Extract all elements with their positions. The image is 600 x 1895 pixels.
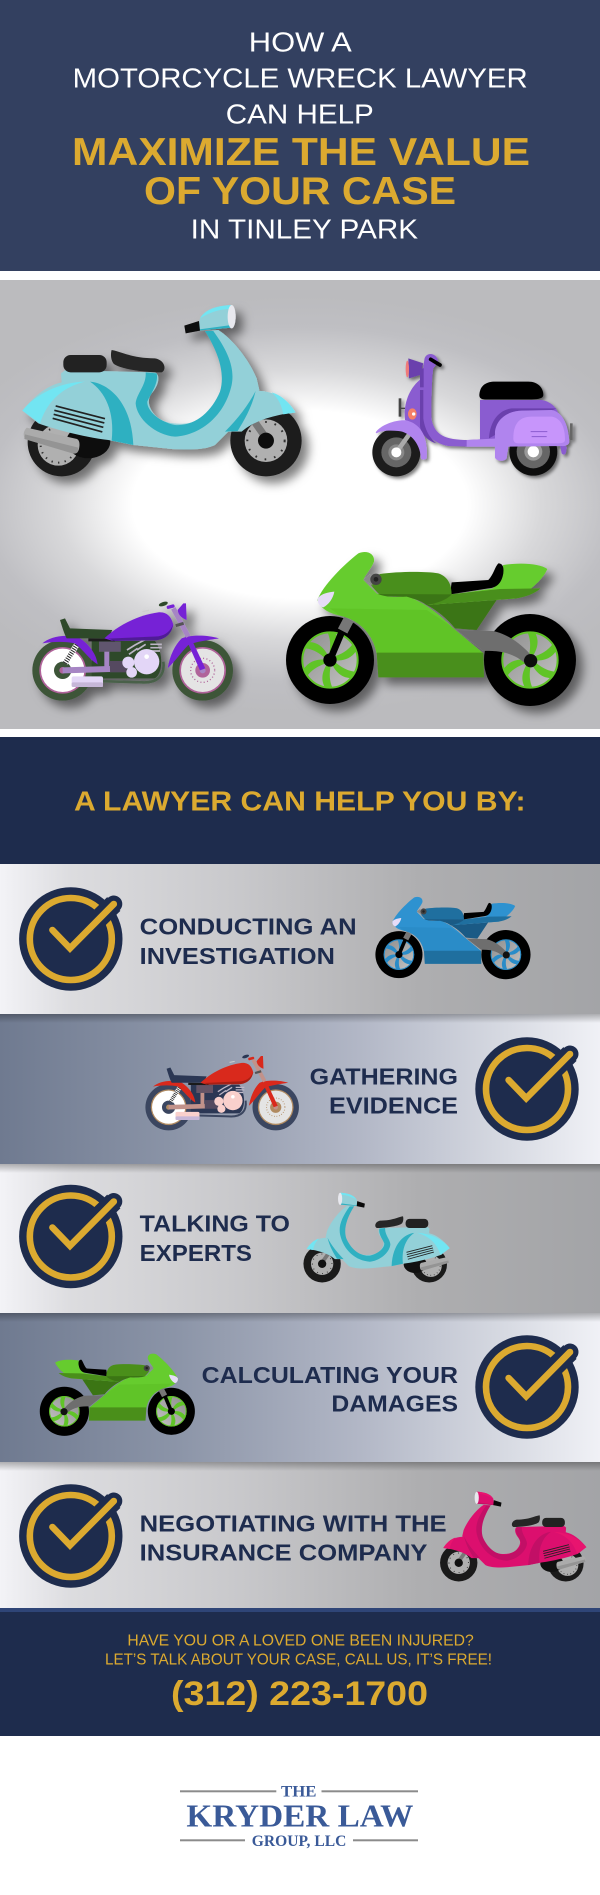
text: calculating your damages: DAMAGES — [331, 1391, 458, 1417]
icon: blue sport motorcycle — [375, 897, 531, 979]
text: calculating your damages: CALCULATING YOUR — [202, 1362, 458, 1388]
text: conducting an investigation: INVESTIGATION — [140, 943, 335, 969]
icon: green sport motorcycle — [40, 1354, 195, 1436]
panel: section heading band — [0, 737, 600, 864]
text: negotiating with the insurance company: INSURANCE COMPANY — [140, 1540, 427, 1566]
text: gathering evidence — [310, 1063, 458, 1119]
text: gathering evidence: GATHERING — [310, 1063, 458, 1089]
text: phone number: (312) 223-1700 — [171, 1675, 428, 1713]
icon: teal scooter — [303, 1193, 450, 1282]
panel: conducting an investigation — [0, 864, 600, 1014]
logo: the kryder law group: KRYDER LAW — [186, 1798, 413, 1834]
panel: call to action footer band — [0, 1608, 600, 1736]
icon: check mark — [19, 1484, 122, 1588]
title: intro lines: CAN HELP — [226, 99, 374, 130]
text: talking to experts: EXPERTS — [140, 1240, 252, 1266]
panel: negotiating with the insurance company — [0, 1462, 600, 1608]
text: negotiating with the insurance company — [140, 1511, 447, 1566]
heading: a lawyer can help you by: A LAWYER CAN HELP YOU BY: — [74, 786, 526, 817]
panel: talking to experts — [0, 1164, 600, 1313]
title: intro lines — [73, 27, 528, 130]
logo: the kryder law group: THE — [281, 1784, 316, 1801]
icon: check mark — [19, 887, 122, 991]
text: negotiating with the insurance company: NEGOTIATING WITH THE — [140, 1511, 447, 1537]
icon: pink scooter — [440, 1492, 586, 1581]
panel: calculating your damages — [0, 1313, 600, 1462]
icon: check mark — [475, 1335, 579, 1439]
text: call to action: HAVE YOU OR A LOVED ONE BEEN INJURED? — [127, 1632, 474, 1649]
header panel — [0, 0, 600, 271]
text: conducting an investigation — [140, 914, 357, 969]
icon: check mark — [19, 1185, 122, 1288]
icon: green sport motorcycle — [286, 552, 576, 706]
title: intro lines: HOW A — [249, 27, 352, 58]
text: talking to experts — [140, 1211, 290, 1266]
icon: teal scooter — [22, 305, 302, 476]
icon: red cruiser motorcycle — [145, 1054, 299, 1130]
panel: gathering evidence — [0, 1014, 600, 1164]
title: location line: IN TINLEY PARK — [191, 214, 418, 245]
title: highlighted lines: OF YOUR CASE — [144, 170, 456, 213]
text: talking to experts: TALKING TO — [140, 1211, 290, 1237]
icon: check mark — [475, 1037, 579, 1141]
logo: the kryder law group: GROUP, LLC — [252, 1833, 346, 1850]
icon: purple cruiser motorcycle — [32, 601, 233, 701]
title: intro lines: MOTORCYCLE WRECK LAWYER — [73, 63, 528, 94]
text: gathering evidence: EVIDENCE — [329, 1093, 458, 1119]
text: calculating your damages — [202, 1362, 458, 1417]
title: highlighted lines: MAXIMIZE THE VALUE — [72, 131, 530, 174]
icon: purple scooter — [372, 354, 573, 476]
text: call to action — [105, 1632, 492, 1668]
text: call to action: LET’S TALK ABOUT YOUR CASE, CALL US, IT’S FREE! — [105, 1651, 492, 1668]
logo: the kryder law group — [180, 1784, 418, 1850]
panel: hero motorcycles — [0, 280, 600, 729]
title: highlighted lines — [72, 131, 530, 213]
text: conducting an investigation: CONDUCTING AN — [140, 914, 357, 940]
